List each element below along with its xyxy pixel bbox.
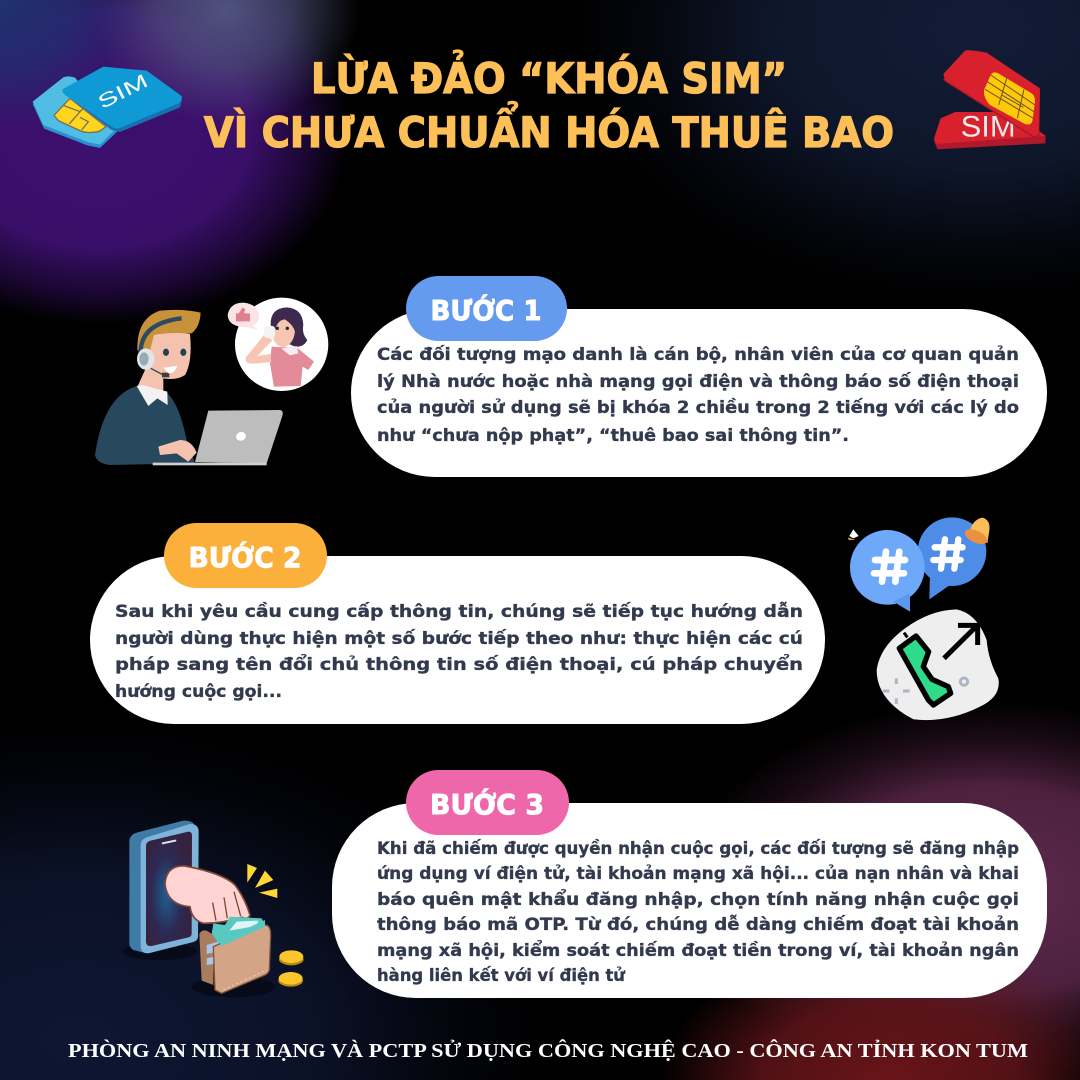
panel: step 3	[332, 770, 1047, 998]
icon: call-centre agent and customer	[95, 298, 328, 465]
step 2 text: người dùng thực hiện một số bước tiếp theo như: thực hiện các cú	[115, 628, 803, 649]
title: LỪA ĐẢO “KHÓA SIM”	[311, 49, 787, 103]
panel: step 2	[90, 523, 825, 724]
step 2 text	[115, 600, 803, 702]
step 3 badge	[406, 770, 569, 835]
icon: hashtag chat bubbles	[848, 517, 999, 720]
step 1 text: lý Nhà nước hoặc nhà mạng gọi điện và thông báo số điện thoại	[377, 371, 1019, 392]
icon: red SIM cards: SIM	[961, 111, 1016, 144]
step 2 text: pháp sang tên đổi chủ thông tin số điện thoại, cú pháp chuyển	[115, 653, 803, 675]
step 3 text	[377, 838, 1019, 986]
step 2 badge: BƯỚC 2	[188, 540, 302, 574]
step 2 badge	[164, 523, 327, 588]
title	[204, 49, 894, 157]
step 3 text: mạng xã hội, kiểm soát chiếm đoạt tiền trong ví, tài khoản ngân	[377, 939, 1019, 961]
step 3 text: ứng dụng ví điện tử, tài khoản mạng xã hội... của nạn nhân và khai	[377, 864, 1019, 884]
step 1 badge: BƯỚC 1	[430, 293, 542, 327]
icon: phone, hand and wallet	[123, 821, 304, 997]
step 2 text: hướng cuộc gọi...	[115, 682, 282, 702]
icon: blue SIM cards	[33, 67, 182, 148]
step 1 text: như “chưa nộp phạt”, “thuê bao sai thông tin”.	[377, 426, 849, 446]
step 3 text: báo quên mật khẩu đăng nhập, chọn tính năng nhận cuộc gọi	[377, 888, 1019, 910]
icon: phone handset on blob	[877, 609, 999, 720]
step 2 text: Sau khi yêu cầu cung cấp thông tin, chúng sẽ tiếp tục hướng dẫn	[115, 600, 803, 622]
footer credit: PHÒNG AN NINH MẠNG VÀ PCTP SỬ DỤNG CÔNG NGHỆ CAO - CÔNG AN TỈNH KON TUM	[68, 1038, 1028, 1062]
icon: blue SIM cards: SIM	[95, 71, 152, 114]
step 3 text: thông báo mã OTP. Từ đó, chúng dễ dàng chiếm đoạt tài khoản	[377, 913, 1019, 935]
step 3 text: hàng liên kết với ví điện tử	[377, 965, 626, 986]
icon: red SIM cards	[934, 50, 1046, 149]
step 3 card	[332, 803, 1047, 998]
step 3 badge: BƯỚC 3	[430, 787, 544, 821]
step 1 text: Các đối tượng mạo danh là cán bộ, nhân viên của cơ quan quản	[377, 344, 1019, 365]
step 1 text: của người sử dụng sẽ bị khóa 2 chiều trong 2 tiếng với các lý do	[377, 397, 1019, 418]
title: VÌ CHƯA CHUẨN HÓA THUÊ BAO	[204, 100, 894, 157]
step 1 card	[351, 309, 1047, 477]
step 1 badge	[406, 276, 567, 341]
step 2 card	[90, 556, 825, 724]
step 1 text	[377, 344, 1019, 446]
panel: step 1	[351, 276, 1047, 477]
step 3 text: Khi đã chiếm được quyền nhận cuộc gọi, các đối tượng sẽ đăng nhập	[377, 838, 1019, 859]
